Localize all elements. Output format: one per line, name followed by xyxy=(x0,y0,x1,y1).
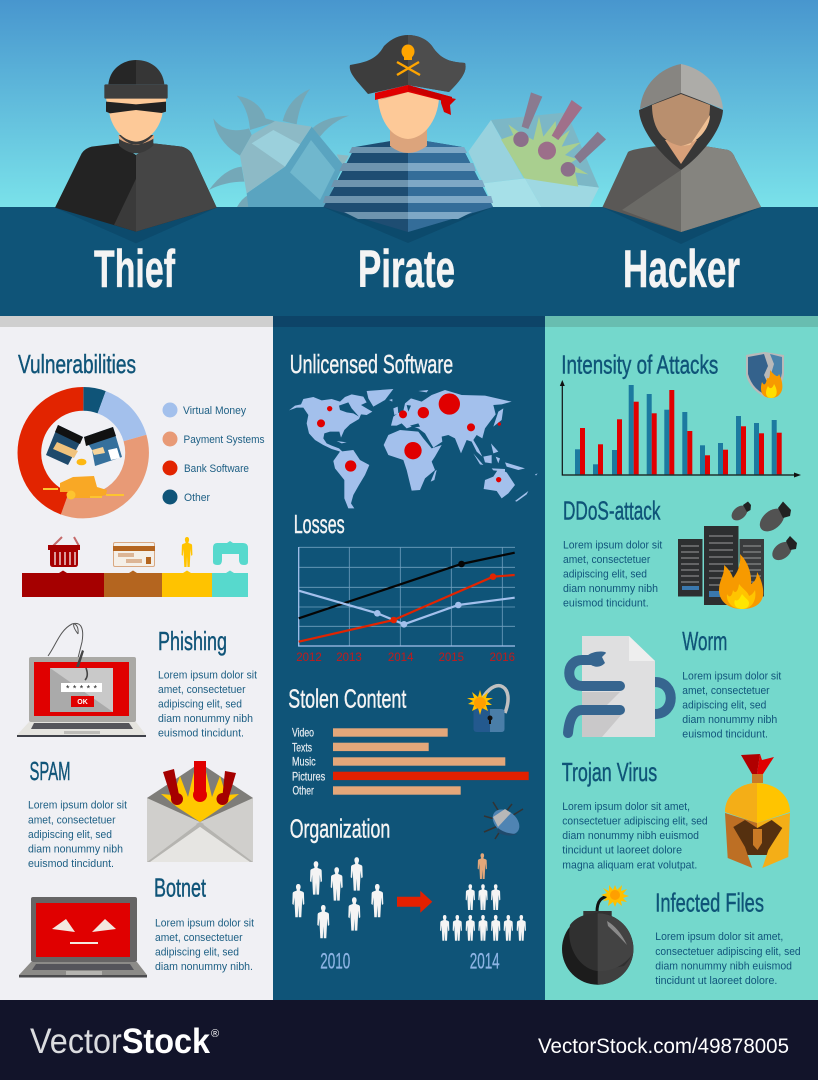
text: spam description: adipiscing elit, sed xyxy=(28,829,112,841)
text: worm description: adipiscing elit, sed xyxy=(682,699,766,711)
heading: Intensity of Attacks: Intensity of Attacks xyxy=(561,349,718,379)
text: botnet description: diam nonummy nibh. xyxy=(155,961,253,973)
text: spam description: euismod tincidunt. xyxy=(28,858,114,870)
panel: unlicensed software, losses, stolen content, organization xyxy=(273,316,545,1000)
icon: botnet laptop xyxy=(19,897,147,978)
text: phishing description: diam nonummy nibh xyxy=(158,713,253,725)
heading: Organization: Organization xyxy=(290,814,390,844)
panel: intensity, ddos, worm, trojan, infected files xyxy=(545,316,818,1000)
line chart: losses: 2015 xyxy=(439,652,464,664)
icon: broken shield xyxy=(746,352,784,398)
text: trojan description: tincidunt ut laoreet dolore xyxy=(562,845,682,857)
text: spam description: amet, consectetuer xyxy=(28,814,116,826)
line chart: losses xyxy=(296,547,515,664)
legend: Bank Software xyxy=(184,463,249,475)
character: hacker xyxy=(602,64,761,244)
character: pirate xyxy=(323,35,493,243)
text: spam description: Lorem ipsum dolor sit xyxy=(28,800,127,812)
middle column background xyxy=(273,316,545,1000)
left column background xyxy=(0,316,273,1000)
text: trojan description xyxy=(562,801,708,871)
panel: vulnerabilities, phishing, spam, botnet xyxy=(0,316,273,1000)
right column background xyxy=(545,316,818,1000)
text: phishing description: amet, consectetuer xyxy=(158,684,246,696)
text: worm description: diam nonummy nibh xyxy=(682,714,777,726)
icon: servers on fire with bombs xyxy=(678,502,797,609)
legend: Other xyxy=(184,492,210,504)
line chart: losses: 2014 xyxy=(388,652,414,664)
text: worm description: Lorem ipsum dolor sit xyxy=(682,670,781,682)
heading: Worm: Worm xyxy=(682,626,727,656)
text: phishing description: adipiscing elit, sed xyxy=(158,698,242,710)
heading: Losses: Losses xyxy=(294,509,345,539)
text: phishing description xyxy=(158,669,257,740)
line chart: losses: 2012 xyxy=(296,652,322,664)
text: phishing description: Lorem ipsum dolor sit xyxy=(158,669,257,681)
heading: SPAM: SPAM xyxy=(30,756,70,786)
text: botnet description: adipiscing elit, sed xyxy=(155,947,239,959)
text: trojan description: magna aliquam erat volutpat. xyxy=(562,859,697,871)
heading: Thief: Thief xyxy=(94,240,175,299)
bar chart: intensity of attacks xyxy=(560,380,801,478)
world map xyxy=(289,389,538,508)
text: worm description xyxy=(682,670,781,740)
icon: bomb xyxy=(562,885,633,985)
text: infected files description: diam nonummy nibh euismod xyxy=(655,960,792,972)
image id: VectorStock.com/49878005 xyxy=(538,1035,789,1058)
bar chart: stolen content: Pictures xyxy=(292,769,325,783)
icon: phishing laptop: ***** xyxy=(66,684,97,694)
donut chart xyxy=(29,399,137,507)
text: infected files description: Lorem ipsum dolor sit amet, xyxy=(655,931,783,943)
text: trojan description: consectetuer adipiscing elit, sed xyxy=(562,816,708,828)
icon: padlock with burst xyxy=(467,686,508,732)
heading: Infected Files: Infected Files xyxy=(655,888,764,918)
text: ddos description: euismod tincidunt. xyxy=(563,598,649,610)
text: ddos description: Lorem ipsum dolor sit xyxy=(563,539,662,551)
icon: trojan helmet xyxy=(725,754,790,868)
icon: bank card xyxy=(113,542,155,566)
bar chart: stolen content: Other xyxy=(292,784,314,798)
text: ddos description: diam nonummy nibh xyxy=(563,583,658,595)
heading: Botnet: Botnet xyxy=(154,873,207,903)
footer band xyxy=(0,1000,818,1080)
heading: Phishing: Phishing xyxy=(158,626,227,656)
people: 2010 xyxy=(292,857,383,938)
people: 2014 pyramid xyxy=(440,853,526,941)
text: phishing description: euismod tincidunt. xyxy=(158,728,244,740)
heading: Hacker: Hacker xyxy=(623,240,740,299)
logo: VectorStock: VectorStock xyxy=(30,1022,210,1061)
icon: background broken window with exclamation marks xyxy=(468,92,606,208)
panel: header xyxy=(0,0,818,316)
stacked bar with icons xyxy=(22,537,248,597)
text: spam description xyxy=(28,800,127,870)
heading: Trojan Virus: Trojan Virus xyxy=(562,757,657,787)
line chart: losses: 2016 xyxy=(490,652,515,664)
text: worm description: amet, consectetuer xyxy=(682,685,770,697)
blue title band xyxy=(0,207,818,316)
legend: Virtual Money xyxy=(183,405,247,417)
icon: person xyxy=(182,537,192,567)
heading: Pirate: Pirate xyxy=(358,240,455,299)
icon: phishing laptop: OK xyxy=(77,699,88,706)
bar chart: stolen content: Texts xyxy=(292,740,312,754)
legend: Payment Systems xyxy=(184,434,264,446)
icon: credit cards and coins xyxy=(43,425,124,500)
text: ddos description: adipiscing elit, sed xyxy=(563,568,647,580)
label: 2014: 2014 xyxy=(470,948,500,973)
text: botnet description: amet, consectetuer xyxy=(155,932,243,944)
icon: phishing laptop xyxy=(17,623,146,737)
text: ddos description: amet, consectetuer xyxy=(563,554,651,566)
bar chart: stolen content xyxy=(292,726,529,798)
heading: Unlicensed Software: Unlicensed Software xyxy=(290,349,453,379)
bar chart: stolen content: Video xyxy=(292,726,314,740)
text: infected files description: tincidunt ut laoreet dolore. xyxy=(655,975,777,987)
text: botnet description xyxy=(155,918,254,973)
arrow xyxy=(397,891,432,913)
icon: background bug xyxy=(209,89,349,208)
heading: DDoS-attack: DDoS-attack xyxy=(563,495,661,525)
sky background xyxy=(0,0,818,208)
text: botnet description: Lorem ipsum dolor sit xyxy=(155,918,254,930)
icon: worm and document xyxy=(568,636,671,737)
icon: basket xyxy=(48,537,80,567)
icon: bug xyxy=(484,802,524,840)
legend xyxy=(162,402,264,504)
text: worm description: euismod tincidunt. xyxy=(682,728,768,740)
text: spam description: diam nonummy nibh xyxy=(28,843,123,855)
bar chart: stolen content: Music xyxy=(292,755,316,769)
registered mark: ® xyxy=(211,1028,219,1040)
icon: gamepad xyxy=(213,541,248,565)
text: infected files description xyxy=(655,931,801,987)
text: trojan description: diam nonummy nibh euismod xyxy=(562,830,699,842)
character: thief xyxy=(55,60,217,243)
text: trojan description: Lorem ipsum dolor sit amet, xyxy=(562,801,690,813)
icon: spam envelope xyxy=(147,761,253,862)
text: ddos description xyxy=(563,539,662,610)
line chart: losses: 2013 xyxy=(336,652,362,664)
text: infected files description: consectetuer adipiscing elit, sed xyxy=(655,946,801,958)
heading: Vulnerabilities: Vulnerabilities xyxy=(18,349,136,379)
heading: Stolen Content: Stolen Content xyxy=(288,684,407,714)
label: 2010: 2010 xyxy=(320,948,350,973)
